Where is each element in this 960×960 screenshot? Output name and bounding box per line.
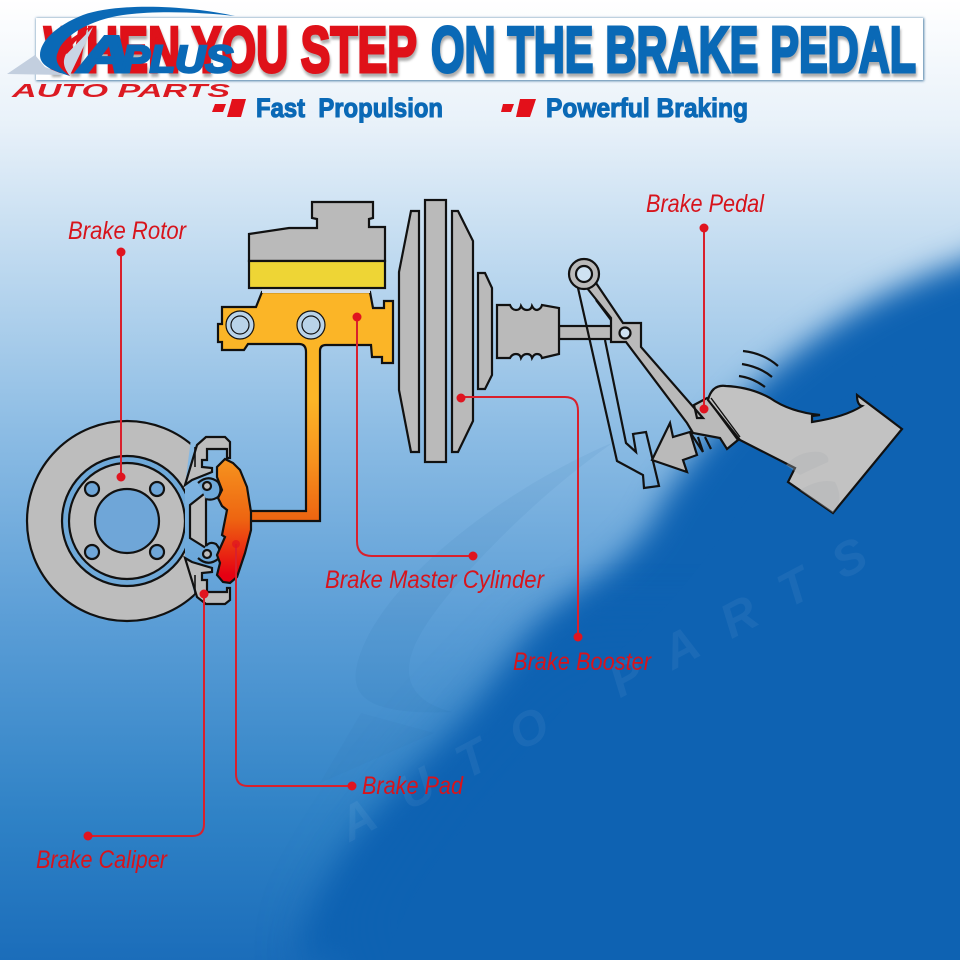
title red part: WHEN YOU STEP [44,13,417,86]
brake pedal lever [587,283,738,449]
title shadow text: WHEN YOU STEP [45,16,418,90]
brake pad [217,459,251,583]
logo tagline: AUTO PARTS [10,81,230,101]
lever top ring [569,259,599,289]
subheading: Powerful Braking: Powerful Braking [546,93,748,123]
reservoir [249,202,385,293]
brake rotor [26,420,195,622]
leader: brake booster [456,394,582,642]
label: Brake Pedal: Brake Pedal [646,190,765,218]
motion arcs [739,351,778,387]
brake booster [399,200,492,462]
leader: brake caliper [84,590,208,840]
pedal linkage [578,288,659,488]
label: Brake Master Cylinder: Brake Master Cylinder [325,566,545,594]
brake fluid line and master cylinder body [218,292,393,521]
pedal pad line [711,398,740,437]
title banner [36,13,924,90]
leader: brake pad [232,540,356,790]
label: Brake Caliper: Brake Caliper [36,846,168,874]
boot [708,386,902,513]
logo wordmark A: A [75,26,132,84]
label: Brake Booster: Brake Booster [513,648,652,676]
label: Brake Rotor: Brake Rotor [68,217,187,245]
logo wordmark PLUS: PLUS [122,39,233,81]
force arrow [652,423,697,472]
leader: brake rotor [116,248,126,482]
watermark logo: AUTO PARTS [329,528,876,852]
label: Brake Pad: Brake Pad [362,772,464,800]
title shadow text [45,16,917,90]
dark blue curved area [298,262,960,960]
lever pivot [620,328,630,338]
pushrod and piston [497,305,613,358]
leader: brake master cylinder [352,312,478,560]
logo: Aplus Auto Parts [7,7,235,101]
subheading: Fast Propulsion: Fast Propulsion [256,93,443,123]
boot shading [786,452,839,513]
spring lines [690,432,711,452]
brake caliper [185,437,230,604]
leader: brake pedal [700,224,708,414]
pedal assembly [497,259,902,513]
